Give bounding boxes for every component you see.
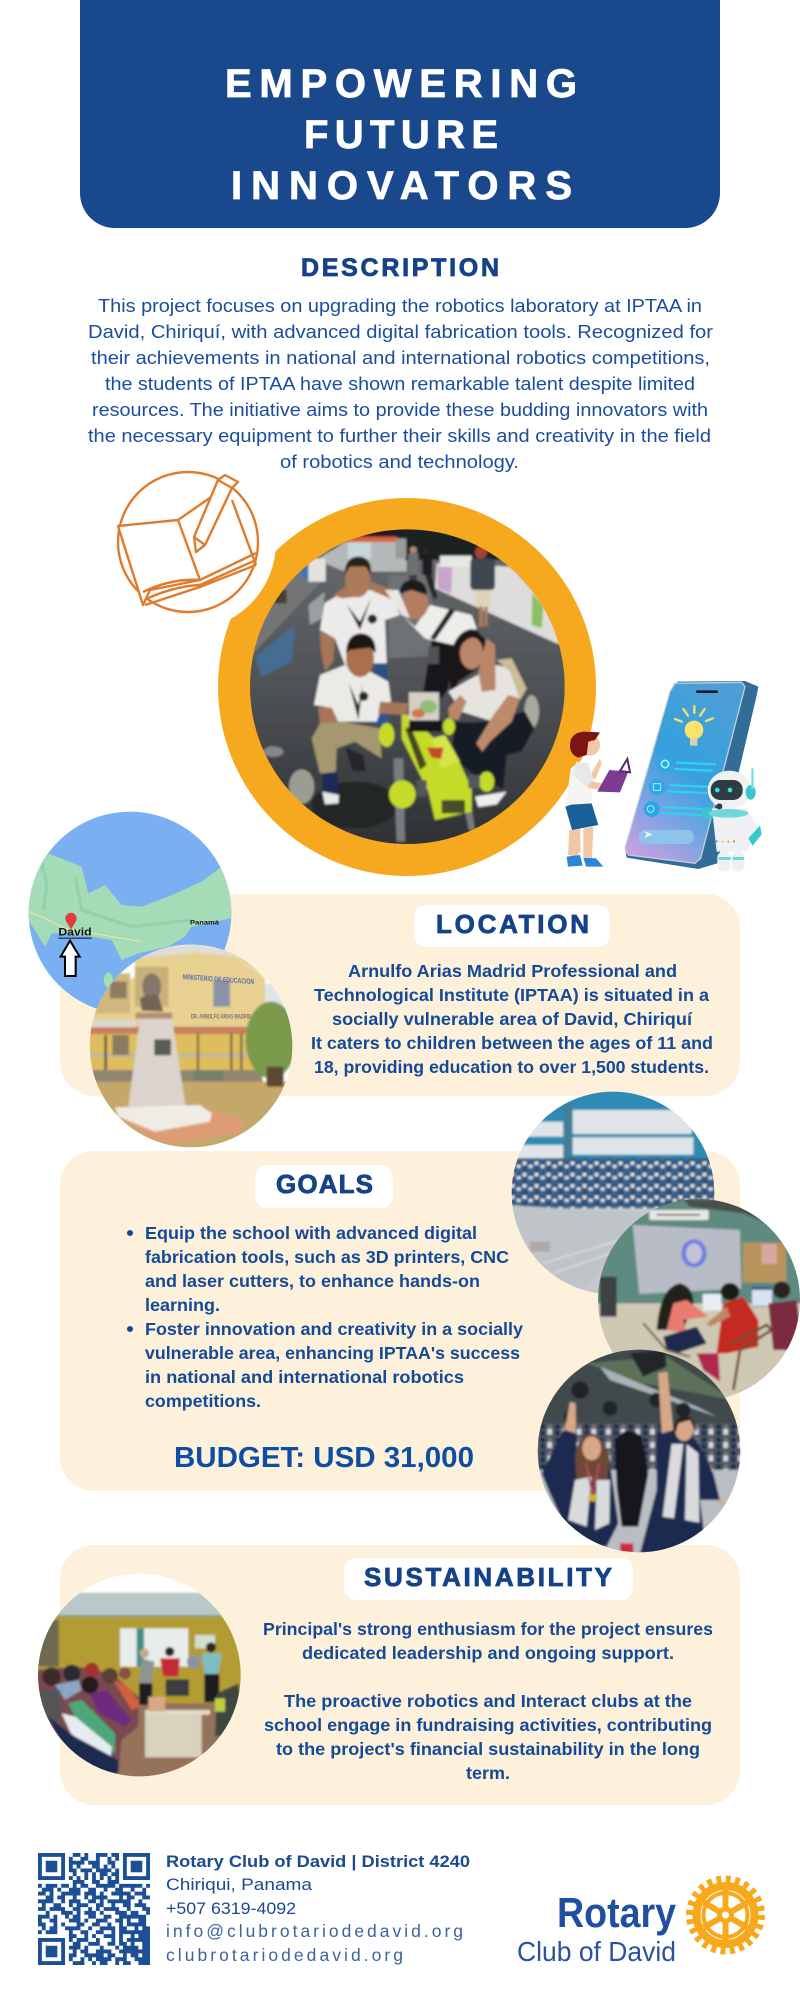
QR code [38,1853,150,1965]
description text: resources. The initiative aims to provide these budding innovators with [92,400,708,420]
description text [88,296,713,472]
goals list: competitions. [145,1391,261,1411]
goals list: Equip the school with advanced digital [145,1223,477,1243]
photo: students in classroom [597,1197,800,1403]
man top [320,590,400,665]
contact details: +507 6319-4092 [166,1900,296,1918]
photo: school with monument: MINISTERIO DE EDUCACION [182,972,255,986]
photo: team with robot dog [245,525,570,850]
goals list: Foster innovation and creativity in a socially [145,1319,523,1339]
label: goals: GOALS [276,1169,373,1199]
location text [311,961,713,1077]
map pin [65,913,77,929]
rotary logo: Rotary [557,1889,677,1936]
rotary logo: Club of David [517,1936,676,1967]
sustainability text: Principal's strong enthusiasm for the project ensures [263,1619,713,1639]
description text: the necessary equipment to further their skills and creativity in the field [88,426,711,446]
description text: David, Chiriquí, with advanced digital fabrication tools. Recognized for [88,322,713,342]
location text: socially vulnerable area of David, Chiriquí [332,1009,693,1029]
panel: goals [60,1151,740,1491]
goals list: in national and international robotics [145,1367,464,1387]
goals list: vulnerable area, enhancing IPTAA's success [145,1343,520,1363]
arrow [61,941,80,976]
kid [565,732,630,867]
panel: location [60,894,740,1096]
contact details: info@clubrotariodedavid.org [166,1921,463,1941]
location text: 18, providing education to over 1,500 students. [314,1057,709,1077]
header banner [80,0,720,228]
contact details: Rotary Club of David | District 4240 [166,1853,470,1871]
robot dog [393,758,405,842]
girl [448,629,487,702]
orange ring behind team photo [100,454,596,876]
location text: Technological Institute (IPTAA) is situated in a [314,985,709,1005]
photo: school with monument: DR. ARNOLFO ARIAS MADRID [191,1015,251,1021]
sustainability text: dedicated leadership and ongoing support. [302,1643,674,1663]
goals list: learning. [145,1295,220,1315]
phone [625,681,758,869]
title [225,62,577,208]
location text: It caters to children between the ages of 11 and [311,1033,713,1053]
sustainability text: The proactive robotics and Interact clubs at the [284,1691,692,1711]
map labels: Panamá [190,919,220,926]
location text: Arnulfo Arias Madrid Professional and [348,961,677,981]
map labels [58,919,220,939]
back people [408,553,418,577]
label: goals [255,1165,393,1208]
photo: graduation [537,1348,743,1557]
contact details: Chiriqui, Panama [166,1876,313,1894]
robot [701,768,762,872]
photo: school with monument [88,943,296,1150]
label: location [414,905,610,947]
title: FUTURE [304,113,498,157]
boy top right [402,605,477,647]
description text: the students of IPTAA have shown remarkable talent despite limited [105,374,695,394]
sustainability text: term. [466,1763,510,1783]
map labels: David [58,927,92,939]
title: INNOVATORS [231,164,572,208]
sustainability text [263,1619,713,1783]
contact details [166,1853,470,1965]
icon: book and pencil [118,472,258,612]
photo: students in gym [510,1090,723,1303]
budget: BUDGET: USD 31,000 [174,1442,474,1474]
description text: of robotics and technology. [280,452,519,472]
goals list: and laser cutters, to enhance hands-on [145,1271,480,1291]
contact details: clubrotariodedavid.org [166,1945,403,1965]
panel: sustainability [60,1545,740,1805]
map of Panama [28,812,232,1009]
description text: This project focuses on upgrading the robotics laboratory at IPTAA in [98,296,702,316]
icon: rotary gear [690,1879,762,1951]
photo: meeting in classroom [35,1570,245,1780]
goals list [127,1223,523,1411]
description text: their achievements in national and international robotics competitions, [91,348,710,368]
goals list: fabrication tools, such as 3D printers, CNC [145,1247,509,1267]
rotary logo [517,1879,762,1967]
label: sustainability: SUSTAINABILITY [364,1562,612,1592]
sustainability text: to the project's financial sustainability in the long [276,1739,700,1759]
label: sustainability [344,1558,633,1600]
illustration: phone with kid and robot [565,681,762,872]
heading: description: DESCRIPTION [301,254,499,282]
sustainability text: school engage in fundraising activities, contributing [264,1715,712,1735]
front boy [370,712,390,726]
title: EMPOWERING [225,62,577,106]
label: location: LOCATION [436,909,589,939]
